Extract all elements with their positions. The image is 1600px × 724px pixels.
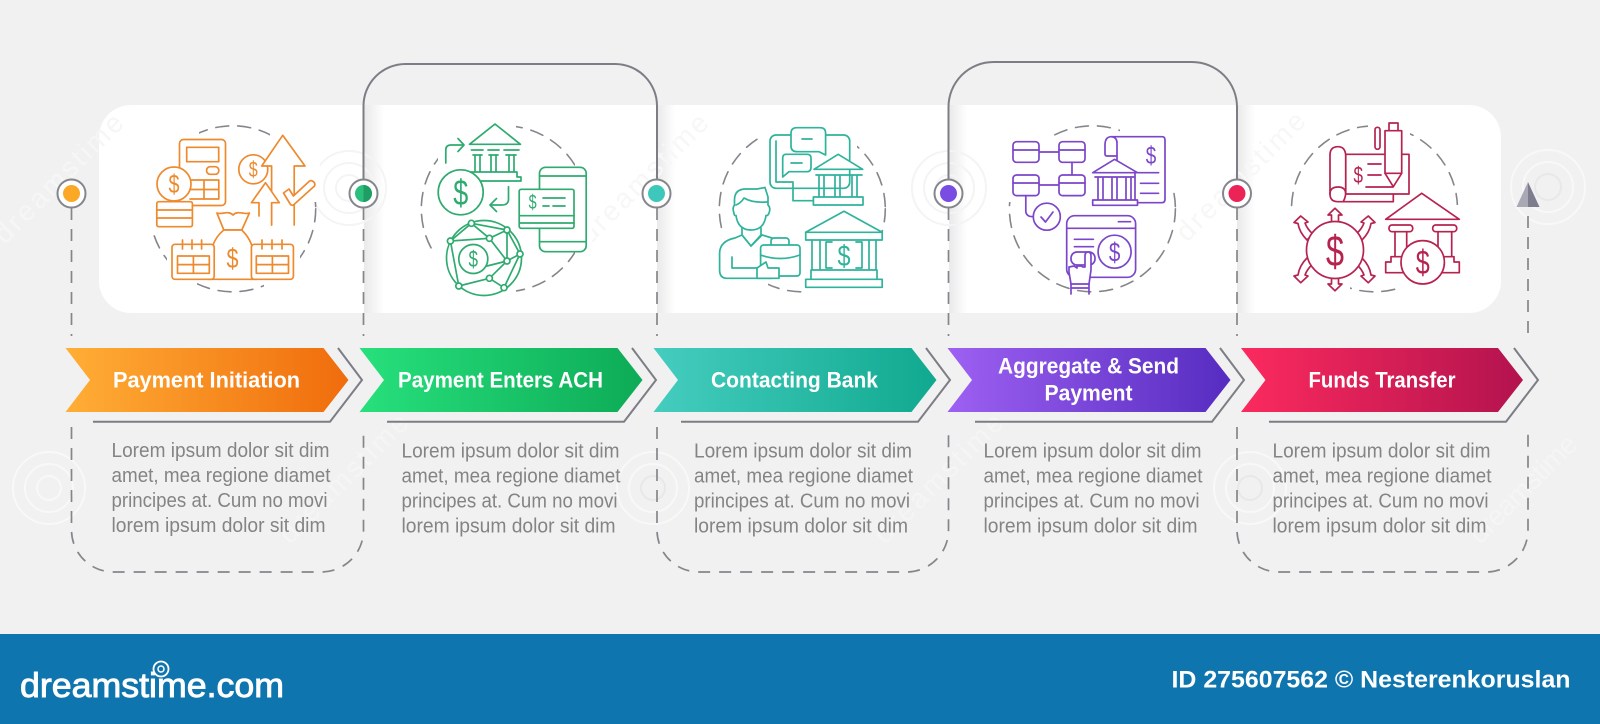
watermark text: dreamstime: [867, 407, 1009, 549]
icon: payment initiation: $: [168, 169, 180, 199]
step 4: aggregate and send payment chevron: [948, 348, 1230, 412]
text block: step 2: amet, mea regione diamet: [402, 466, 621, 488]
icon: contacting bank: $: [838, 240, 851, 273]
watermark text: dreamstime: [1169, 105, 1311, 247]
text block: step 2: principes at. Cum no movi: [402, 490, 618, 512]
text block: step 5: lorem ipsum dolor sit dim: [1272, 516, 1486, 538]
step 1: payment initiation chevron: [66, 348, 348, 412]
step 5: funds transfer chevron: Funds Transfer: [1308, 368, 1456, 392]
watermark text: dreamstime: [272, 407, 414, 549]
icon: aggregate and send payment: $: [1109, 238, 1120, 268]
node: step 2: [350, 180, 378, 208]
icon: payment enters ACH: $: [453, 172, 468, 213]
text block: step 5: Lorem ipsum dolor sit dim: [1272, 440, 1490, 462]
icon: payment initiation: $: [226, 243, 239, 274]
icon: payment enters ACH: $: [469, 246, 478, 272]
step 2: payment enters ACH chevron: [360, 348, 642, 412]
watermark text: dreamstime: [572, 107, 714, 249]
text block: step 4: [984, 440, 1203, 538]
outline chevrons and underlines: [93, 348, 1538, 422]
step 1: payment initiation chevron: Payment Initiation: [113, 368, 300, 392]
watermark text: dreamstime: [1462, 428, 1583, 549]
footer banner: [0, 634, 1600, 724]
text block: step 5: amet, mea regione diamet: [1272, 466, 1492, 488]
text block: step 5: principes at. Cum no movi: [1272, 490, 1488, 512]
text block: step 3: principes at. Cum no movi: [694, 490, 910, 512]
step 4: aggregate and send payment chevron: Payment: [1044, 380, 1133, 406]
text block: step 4: amet, mea regione diamet: [984, 466, 1203, 488]
node: step 5: [1223, 180, 1251, 208]
step 2: payment enters ACH chevron: Payment Enters ACH: [398, 368, 603, 392]
icon: payment initiation: $: [249, 157, 258, 182]
icon: funds transfer: $: [1416, 244, 1430, 282]
footer credit: ID 275607562 © Nesterenkoruslan: [1172, 666, 1570, 694]
icon: payment enters ACH: $: [529, 192, 537, 214]
icon: funds transfer: $: [1326, 227, 1344, 276]
step 3: contacting bank chevron: Contacting Bank: [711, 368, 879, 392]
node: step 4: [934, 180, 962, 208]
panel: white icon band: [99, 105, 1501, 313]
text block: step 4: principes at. Cum no movi: [984, 490, 1200, 512]
watermark spirals: [13, 150, 1585, 524]
text block: step 2: lorem ipsum dolor sit dim: [402, 516, 616, 538]
text block: step 1: amet, mea regione diamet: [112, 465, 331, 487]
step 4: aggregate and send payment chevron: Aggregate & Send: [998, 354, 1179, 378]
text block: step 1: [112, 440, 331, 537]
text block: step 4: lorem ipsum dolor sit dim: [984, 516, 1198, 538]
text block: step 2: Lorem ipsum dolor sit dim: [402, 440, 620, 462]
node: step 1: [58, 180, 86, 208]
icon: contacting bank: [715, 120, 890, 295]
icon: payment initiation: [145, 122, 320, 294]
text block: step 5: [1272, 440, 1492, 538]
text block: step 3: Lorem ipsum dolor sit dim: [694, 440, 912, 462]
icon: aggregate and send payment: [1005, 122, 1180, 294]
step 5: funds transfer chevron: [1241, 348, 1523, 412]
node: step 3: [642, 180, 670, 208]
text block: step 3: lorem ipsum dolor sit dim: [694, 516, 908, 538]
footer logo: dreamstime.com: [20, 667, 284, 705]
text block: step 3: [694, 440, 913, 538]
icon: payment enters ACH: [421, 120, 592, 296]
icon: end triangle: [1516, 182, 1540, 207]
text block: step 1: lorem ipsum dolor sit dim: [112, 515, 326, 537]
text block: step 1: principes at. Cum no movi: [112, 490, 328, 512]
step 3: contacting bank chevron: [654, 348, 936, 412]
watermark text: [0, 105, 1583, 549]
text block: step 3: amet, mea regione diamet: [694, 466, 913, 488]
connector: dashed bottom arcs: [72, 427, 1528, 572]
text block: step 1: Lorem ipsum dolor sit dim: [112, 440, 330, 462]
icon: aggregate and send payment: $: [1146, 142, 1156, 170]
icon: funds transfer: $: [1354, 162, 1363, 188]
text block: step 2: [402, 440, 621, 538]
icon: funds transfer: [1288, 120, 1462, 295]
text block: step 4: Lorem ipsum dolor sit dim: [984, 440, 1202, 462]
connector: dashed verticals above chevrons: [72, 208, 1528, 336]
connector: solid top arcs: [364, 62, 1237, 180]
